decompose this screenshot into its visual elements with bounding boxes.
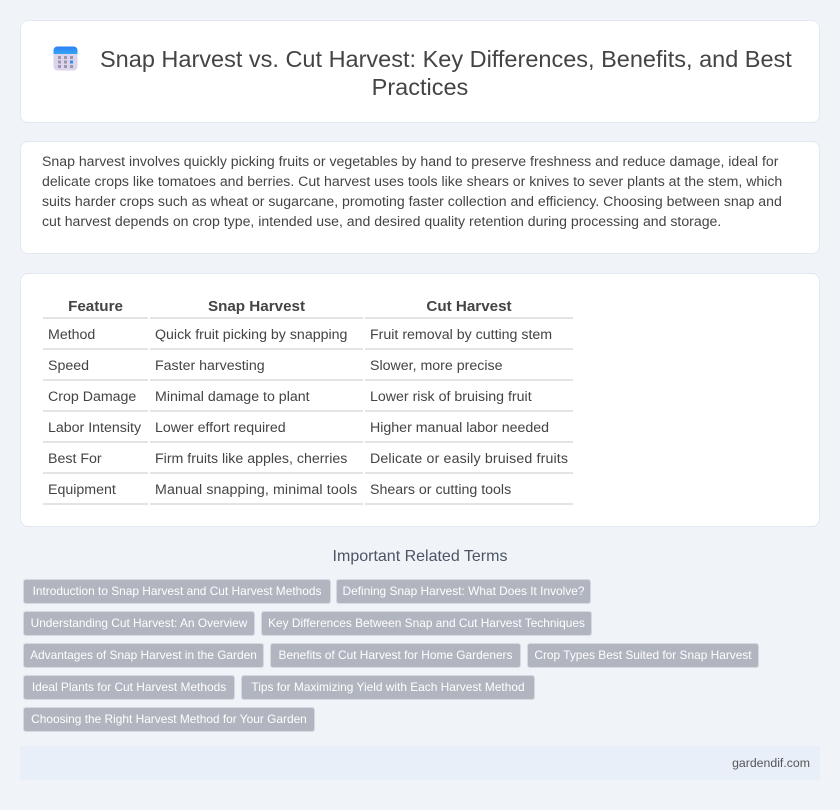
row: Equipment: Equipment	[48, 482, 116, 498]
header: Snap Harvest: Snap Harvest	[208, 298, 305, 315]
title: Practices	[372, 74, 468, 100]
title: Snap Harvest vs. Cut Harvest: Key Differences, Benefits, and Best	[100, 46, 792, 72]
header: Feature: Feature	[68, 298, 123, 315]
row: Labor Intensity: Lower effort required	[155, 420, 286, 436]
summary text: Snap harvest involves quickly picking fruits or vegetables by hand to preserve freshness and reduce damage, ideal for	[42, 153, 778, 169]
tag: Advantages of Snap Harvest in the Garden	[30, 648, 257, 662]
summary text: cut harvest depends on crop type, intended use, and desired quality retention during processing and storage.	[42, 213, 721, 229]
tag: Tips for Maximizing Yield with Each Harvest Method	[251, 680, 525, 694]
row: Speed: Faster harvesting	[155, 358, 265, 374]
row: Labor Intensity: Higher manual labor needed	[370, 420, 549, 436]
summary text: suits harder crops such as wheat or sugarcane, promoting faster collection and efficiency. Choosing between snap and	[42, 193, 782, 209]
tag	[261, 611, 592, 636]
tag	[241, 675, 535, 700]
tag	[23, 675, 235, 700]
footer bar	[20, 746, 820, 780]
row: Crop Damage	[48, 389, 532, 405]
tag: Defining Snap Harvest: What Does It Involve?	[343, 584, 584, 598]
tag	[270, 643, 521, 668]
row: Method: Fruit removal by cutting stem	[370, 327, 552, 343]
row: Best For: Delicate or easily bruised fruits	[370, 451, 568, 467]
row: Method: Quick fruit picking by snapping	[155, 327, 347, 343]
row: Labor Intensity	[48, 420, 549, 436]
tag: Benefits of Cut Harvest for Home Gardeners	[279, 648, 512, 662]
tag	[23, 643, 264, 668]
footer source: gardendif.com	[732, 756, 810, 770]
tag: Choosing the Right Harvest Method for Your Garden	[31, 712, 307, 726]
title	[100, 46, 792, 100]
row: Method	[48, 327, 552, 343]
tag	[23, 611, 255, 636]
row: Speed: Slower, more precise	[370, 358, 502, 374]
summary text	[42, 153, 782, 229]
panel: title header	[20, 20, 820, 123]
row: Labor Intensity: Labor Intensity	[48, 420, 141, 436]
panel: comparison table	[20, 273, 820, 527]
tag	[336, 579, 591, 604]
tag: Crop Types Best Suited for Snap Harvest	[534, 648, 752, 662]
header: Cut Harvest: Cut Harvest	[426, 298, 512, 315]
tag list	[23, 579, 759, 732]
tag: Ideal Plants for Cut Harvest Methods	[32, 680, 226, 694]
row: Method: Method	[48, 327, 95, 343]
heading: related terms: Important Related Terms	[333, 548, 507, 565]
row: Equipment: Manual snapping, minimal tools	[155, 482, 357, 498]
row: Crop Damage: Crop Damage	[48, 389, 136, 405]
tag: Key Differences Between Snap and Cut Harvest Techniques	[268, 616, 585, 630]
row: Crop Damage: Lower risk of bruising fruit	[370, 389, 532, 405]
row: Best For: Best For	[48, 451, 102, 467]
tag	[527, 643, 759, 668]
tag	[23, 579, 331, 604]
row: Speed	[48, 358, 502, 374]
row: Speed: Speed	[48, 358, 89, 374]
tag: Understanding Cut Harvest: An Overview	[31, 616, 247, 630]
row: Equipment	[48, 482, 511, 498]
icon: calendar	[54, 46, 78, 70]
tag	[23, 707, 315, 732]
summary text: delicate crops like tomatoes and berries. Cut harvest uses tools like shears or knives to sever plants at the stem, which	[42, 173, 782, 189]
comparison table	[43, 298, 573, 505]
panel: summary	[20, 141, 820, 254]
row: Best For	[48, 451, 568, 467]
row: Best For: Firm fruits like apples, cherries	[155, 451, 347, 467]
row: Equipment: Shears or cutting tools	[370, 482, 511, 498]
row: Crop Damage: Minimal damage to plant	[155, 389, 310, 405]
tag: Introduction to Snap Harvest and Cut Harvest Methods	[33, 584, 321, 598]
